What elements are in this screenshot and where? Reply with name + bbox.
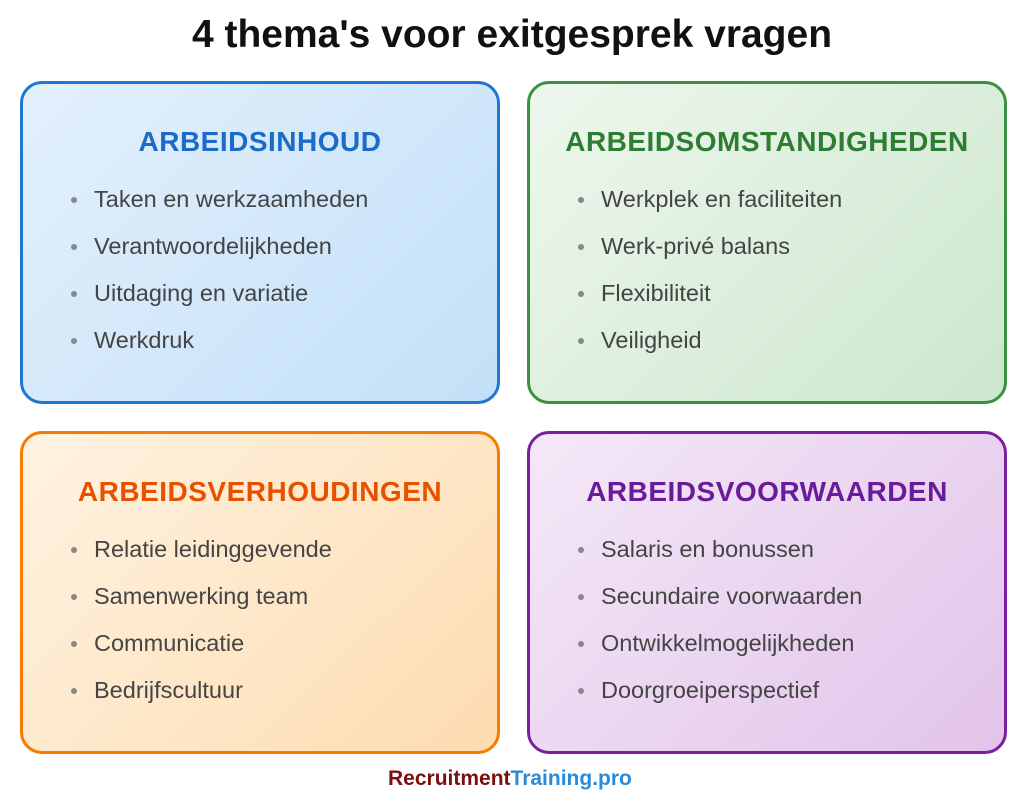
list: arbeidsomstandigheden: Flexibiliteit (601, 280, 711, 306)
list: arbeidsomstandigheden (578, 186, 842, 353)
heading: arbeidsinhoud: ARBEIDSINHOUD (139, 126, 381, 157)
panel: arbeidsvoorwaarden (527, 431, 1007, 754)
list: arbeidsinhoud: Uitdaging en variatie (94, 280, 308, 306)
list: arbeidsomstandigheden: Werk-privé balans (601, 233, 790, 259)
list: arbeidsvoorwaarden (578, 536, 862, 703)
panel: arbeidsomstandigheden (527, 81, 1007, 404)
list: arbeidsvoorwaarden: Doorgroeiperspectief (601, 677, 819, 703)
list: arbeidsinhoud (71, 186, 368, 353)
list: arbeidsomstandigheden: Werkplek en faciliteiten (601, 186, 842, 212)
list: arbeidsvoorwaarden: Salaris en bonussen (601, 536, 814, 562)
heading: arbeidsvoorwaarden: ARBEIDSVOORWAARDEN (586, 476, 948, 507)
footer logo: RecruitmentTraining.pro (388, 767, 632, 790)
heading: arbeidsverhoudingen: ARBEIDSVERHOUDINGEN (78, 476, 442, 507)
panel: arbeidsverhoudingen (20, 431, 500, 754)
list: arbeidsverhoudingen: Relatie leidinggevende (94, 536, 332, 562)
list: arbeidsvoorwaarden: Ontwikkelmogelijkheden (601, 630, 854, 656)
list: arbeidsverhoudingen: Samenwerking team (94, 583, 308, 609)
list: arbeidsverhoudingen (71, 536, 332, 703)
panel: arbeidsinhoud (20, 81, 500, 404)
list: arbeidsvoorwaarden: Secundaire voorwaarden (601, 583, 862, 609)
list: arbeidsinhoud: Taken en werkzaamheden (94, 186, 368, 212)
list: arbeidsinhoud: Werkdruk (94, 327, 194, 353)
heading: arbeidsomstandigheden: ARBEIDSOMSTANDIGHEDEN (565, 126, 969, 157)
list: arbeidsverhoudingen: Bedrijfscultuur (94, 677, 243, 703)
title: 4 thema's voor exitgesprek vragen (192, 13, 832, 56)
list: arbeidsomstandigheden: Veiligheid (601, 327, 702, 353)
list: arbeidsinhoud: Verantwoordelijkheden (94, 233, 332, 259)
list: arbeidsverhoudingen: Communicatie (94, 630, 244, 656)
